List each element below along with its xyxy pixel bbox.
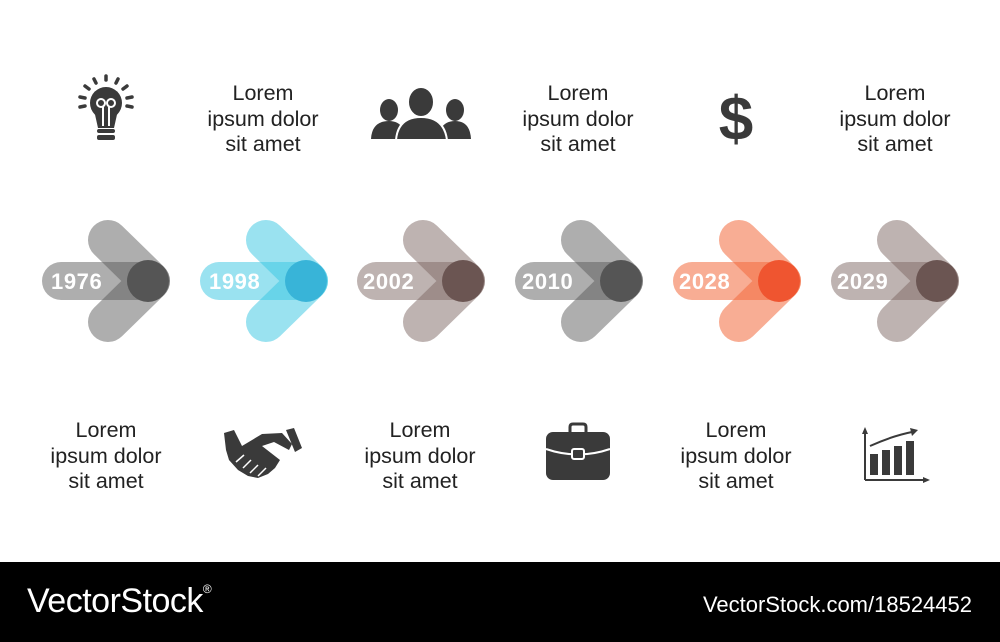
icon: dollar: $ (719, 85, 753, 154)
arrow: 2002 (357, 240, 485, 322)
text: bottom 1: Lorem (76, 418, 136, 442)
text: top 1: ipsum dolor (207, 106, 319, 130)
text: bottom 3 (680, 418, 792, 493)
footer: logo: VectorStock® (27, 582, 211, 620)
icon: people (371, 87, 471, 140)
arrow: 2029: 2029 (837, 269, 888, 294)
text: top 3: ipsum dolor (839, 106, 951, 130)
text: bottom 3: ipsum dolor (680, 444, 792, 468)
arrow: 1998 (200, 240, 328, 322)
text: top 2: ipsum dolor (522, 106, 634, 130)
icon: light bulb (80, 76, 132, 140)
text: bottom 2 (364, 418, 476, 493)
text: top 3: Lorem (865, 81, 925, 105)
footer: url: VectorStock.com/18524452 (703, 592, 972, 617)
icon: handshake (224, 428, 302, 478)
text: bottom 3: sit amet (698, 469, 774, 493)
text: top 1 (207, 81, 319, 156)
arrow: 2010: 2010 (522, 269, 573, 294)
text: top 2 (522, 81, 634, 156)
arrow: 1976 (42, 240, 170, 322)
text: bottom 1: ipsum dolor (50, 444, 162, 468)
text: bottom 2: ipsum dolor (364, 444, 476, 468)
footer bar (0, 562, 1000, 642)
arrow: 2002: 2002 (363, 269, 414, 294)
icon: briefcase (546, 424, 610, 480)
text: top 2: sit amet (540, 132, 616, 156)
text: bottom 1: sit amet (68, 469, 144, 493)
arrow: 2029 (831, 240, 959, 322)
arrow: 1998: 1998 (209, 269, 260, 294)
arrow: 2010 (515, 240, 643, 322)
text: top 1: Lorem (233, 81, 293, 105)
text: bottom 3: Lorem (706, 418, 766, 442)
text: bottom 2: Lorem (390, 418, 450, 442)
arrow: 2028 (673, 240, 801, 322)
text: top 1: sit amet (225, 132, 301, 156)
text: bottom 1 (50, 418, 162, 493)
arrow: 2028: 2028 (679, 269, 730, 294)
text: top 3 (839, 81, 951, 156)
text: top 2: Lorem (548, 81, 608, 105)
icon: bar chart (862, 427, 930, 483)
arrow: 1976: 1976 (51, 269, 102, 294)
text: bottom 2: sit amet (382, 469, 458, 493)
text: top 3: sit amet (857, 132, 933, 156)
